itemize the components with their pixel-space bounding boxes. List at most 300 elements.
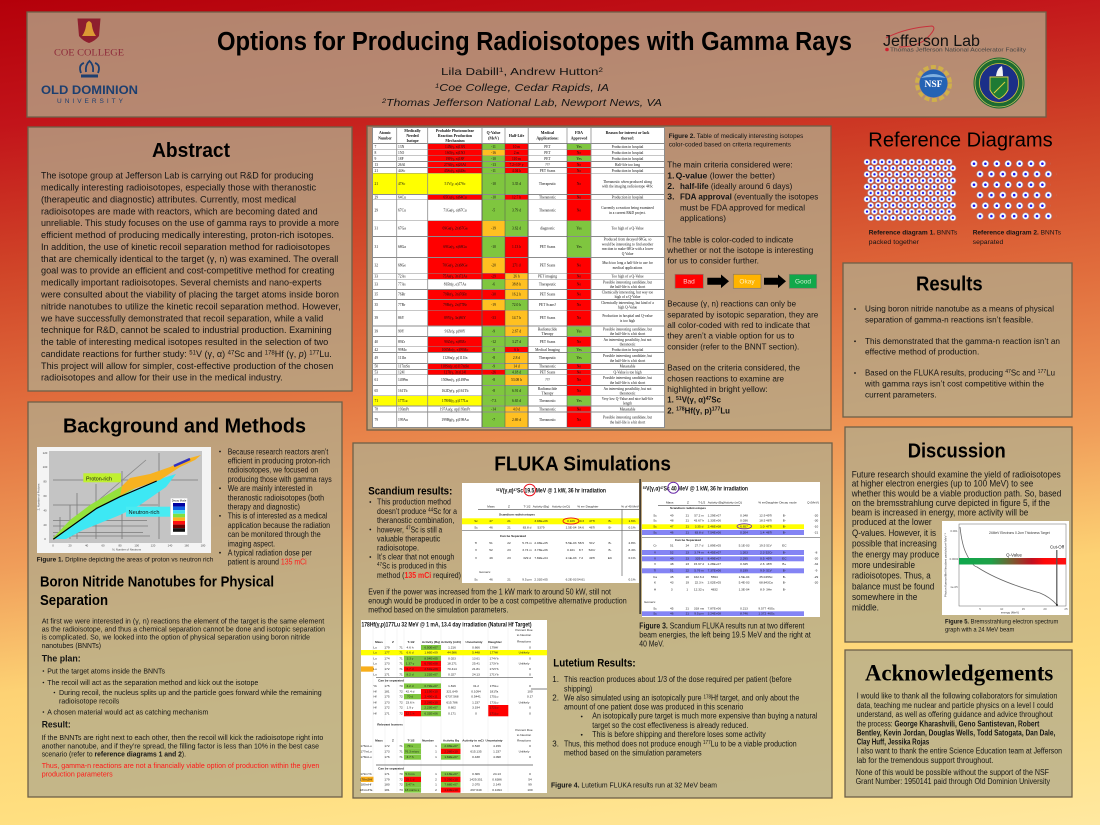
chart: bremsstrahlung spectrum: 20 (1043, 607, 1047, 611)
table: lutetium results: 0 (475, 712, 477, 716)
table: scandium at 19.5 MeV: Activity (Bq) (533, 504, 549, 508)
table: lutetium results: 0 (529, 646, 531, 650)
abstract text: medically interesting radioisotopes, especially those with theranostic (41, 183, 317, 193)
table: lutetium results: 172 (384, 706, 390, 710)
table: scandium at 19.5 MeV: 52 (489, 548, 493, 552)
table: medically interesting isotopes: No (577, 303, 581, 307)
table: medically interesting isotopes: 13 (374, 163, 378, 167)
table: scandium at 19.5 MeV: 2.31E+05 (534, 577, 548, 581)
table: scandium at 40 MeV: Mass (666, 500, 674, 504)
table: scandium at 40 MeV: 21 (686, 519, 689, 523)
lutetium results list: 3. (552, 739, 559, 748)
table: medically interesting isotopes: 2.69 d (512, 418, 521, 422)
abstract text: goal was to provide an efficient and cost-competitive method for creating (41, 266, 334, 276)
table: scandium at 40 MeV: 9.577 (758, 606, 766, 610)
result text (42, 733, 323, 759)
table: medically interesting isotopes: 50 (374, 365, 378, 369)
scandium bullets: Sc for a (433, 506, 457, 516)
table: medically interesting isotopes: Chemically interesting, but way too (602, 291, 653, 296)
table: medically interesting isotopes: 33 (374, 282, 378, 286)
abstract text: unreliable. This study focuses on the use of gamma rays to provide a more (41, 218, 339, 228)
table: lutetium results: 175Lu (490, 684, 499, 688)
table: scandium at 19.5 MeV: Sc (474, 577, 478, 581)
criteria list (667, 160, 818, 223)
lutetium results list: Thus, this method does not produce enough (564, 739, 721, 748)
table: medically interesting isotopes: FDA (575, 131, 583, 135)
table: lutetium results: 0.1094 (471, 690, 481, 694)
table: medically interesting isotopes: Medically (404, 129, 421, 133)
table: lutetium results: Lu (373, 667, 377, 671)
table: scandium at 40 MeV: 3.74 m (694, 550, 704, 554)
table: lutetium results: 1.37 y (406, 662, 415, 666)
table: medically interesting isotopes: Theranostic (539, 399, 556, 403)
divider between scandium tables (640, 479, 641, 614)
table: scandium at 19.5 MeV: B- (608, 548, 612, 552)
table: medically interesting isotopes: 21 (374, 169, 378, 173)
chart: bremsstrahlung spectrum: 15 (1022, 607, 1025, 611)
chart: dripline figure 1: 120 (43, 451, 48, 455)
table: scandium at 40 MeV: -21 (814, 530, 819, 534)
table: medically interesting isotopes: 27Al(γ, n)26Al (444, 163, 466, 168)
background bullets: therapy and diagnostic) (228, 502, 300, 512)
gamma-n explanation: all color-coded with red to indicate that (667, 320, 811, 330)
table: scandium at 19.5 MeV: 6.2E-03 (566, 577, 577, 581)
table: medically interesting isotopes: PET Scans (540, 169, 556, 173)
table: scandium at 40 MeV: 47Ti (766, 524, 772, 528)
lutetium results list: amount of one patient dose was produced in this scenario (564, 703, 744, 712)
table: scandium at 19.5 MeV: 21 (507, 526, 511, 530)
discussion text: at higher electron energies (up to 100 MeV) to see (852, 479, 1033, 489)
table: scandium at 40 MeV: 45 (670, 575, 674, 579)
table: lutetium results: Uncertainty (465, 640, 483, 644)
abstract text: that are chemically identical to the target (γ, n) was examined. The overall (41, 254, 338, 264)
table: lutetium results: 4.156 (493, 744, 501, 748)
table: medically interesting isotopes: An interesting possibility, but not (604, 338, 651, 343)
abstract text: Lu. (319, 349, 332, 359)
criteria list: Q-value (lower the better) (676, 170, 775, 180)
table: medically interesting isotopes: -6 (492, 282, 495, 286)
table: lutetium results: 0 (529, 712, 531, 716)
table: lutetium results: Activity (mCi) (441, 640, 461, 644)
table: lutetium results: 2 (435, 788, 437, 792)
table: medically interesting isotopes: in a current R&D project. (609, 211, 646, 215)
table: lutetium results: 1.237 (493, 749, 501, 753)
table: scandium at 19.5 MeV: V(γ,α) (500, 488, 513, 495)
table: medically interesting isotopes: Yes (576, 145, 582, 149)
results bullets (854, 304, 1060, 399)
table: scandium at 40 MeV: 49 (670, 513, 674, 517)
acknowledgements text: I also want to thank the entire Science Education team at Jefferson (857, 747, 1062, 756)
table: scandium at 40 MeV: Activity (Bq) (708, 500, 724, 504)
table: scandium at 40 MeV: 3He (766, 588, 772, 592)
table: lutetium results: Lu (373, 656, 377, 660)
table: lutetium results: 100 (527, 788, 533, 792)
table: lutetium results: 1 (435, 749, 437, 753)
table: medically interesting isotopes: Theranostic (539, 208, 556, 212)
background bullets: theranostic radioisotopes (both (228, 492, 324, 502)
table: lutetium results: 1 (435, 772, 437, 776)
boron intro text: At first we were interested in (γ, n) reactions the element of the target is the same element (42, 616, 325, 625)
logo: Old Dominion University: UNIVERSITY (57, 98, 124, 105)
table: scandium at 40 MeV: 4832 (711, 588, 718, 592)
discussion text: radioisotopes. Thus, a (852, 571, 931, 581)
table: lutetium results: 2.61E+09 (424, 667, 438, 671)
table: medically interesting isotopes: 8 (374, 151, 376, 155)
table: medically interesting isotopes: 38.8 h (512, 282, 521, 286)
table: scandium at 19.5 MeV: 0.101 (567, 548, 575, 552)
table: medically interesting isotopes: Number (378, 136, 392, 140)
caption: reference diagram 1 (869, 230, 958, 246)
table: scandium at 40 MeV: 52Cr (766, 550, 772, 554)
table: lutetium results: 6.72E+07 (424, 684, 438, 688)
table: scandium at 40 MeV: 49 (670, 557, 674, 561)
table: medically interesting isotopes: No (577, 378, 581, 382)
the plan bullets: The recoil will act as the separation method and kick out the isotope (47, 678, 258, 687)
table: medically interesting isotopes: -20 (491, 264, 496, 268)
table: medically interesting isotopes: -7 (492, 418, 495, 422)
table: lutetium results: Activity Bq (443, 739, 459, 743)
table: medically interesting isotopes: Q Value (622, 252, 634, 256)
table: medically interesting isotopes: the half-life is a bit short (610, 420, 645, 424)
acknowledgements text (856, 692, 1062, 786)
figure 2 caption (669, 133, 804, 149)
result text: scenario (refer to reference diagrams 1 and 2). (42, 750, 186, 759)
figure 1 caption: Figure 1. Dripline depicting the areas of proton vs neutron rich (37, 557, 214, 564)
table: lutetium results: to Neutron (517, 733, 531, 737)
table: lutetium results: to Neutron (517, 633, 531, 637)
table: medically interesting isotopes: the half-life is a bit short (610, 359, 645, 363)
table: medically interesting isotopes: Mechanism (445, 139, 465, 143)
logo: NSF: NSF (925, 80, 943, 90)
table: medically interesting isotopes: Production in hospital (612, 157, 643, 161)
result heading: Result: (42, 720, 71, 730)
table: scandium at 19.5 MeV: 5.5E-03 (566, 541, 577, 545)
table: scandium at 40 MeV: Ca (653, 575, 657, 579)
table: medically interesting isotopes: Yes (576, 348, 582, 352)
table: lutetium results: 173 (384, 662, 390, 666)
table: medically interesting isotopes: 35 (374, 303, 378, 307)
table: lutetium results: 171Yb (490, 672, 499, 676)
table: medically interesting isotopes: 29 (374, 196, 378, 200)
table: scandium at 19.5 MeV: V (475, 548, 478, 552)
table: scandium at 40 MeV: 1.89E+05 (708, 544, 721, 548)
table: scandium at 40 MeV: V(γ,α) (646, 486, 660, 493)
label: neutron-rich (126, 507, 170, 517)
table: scandium at 40 MeV: 45 (670, 606, 674, 610)
table: scandium at 19.5 MeV: 52Cr (589, 548, 595, 552)
table: scandium at 40 MeV: V (654, 557, 657, 561)
table: medically interesting isotopes: 127I(γ, 3n)124I (444, 370, 467, 376)
result text: another nanotube, and if they’re spread, the filling factor is less than 10% in the best case (42, 741, 319, 750)
table: scandium at 40 MeV: 3.24E+08 (708, 612, 721, 616)
table: medically interesting isotopes: Q-Value (487, 131, 501, 135)
table: scandium at 40 MeV: Sc (653, 519, 657, 523)
chosen reactions: chosen reactions to examine are (667, 373, 784, 383)
chart: bremsstrahlung spectrum: 25 (1064, 607, 1068, 611)
table: medically interesting isotopes: Theranostic (539, 418, 556, 422)
abstract text: 177 (309, 350, 320, 356)
background bullets: application because the radiation (228, 520, 330, 530)
the plan bullets: During recoil, the nucleus splits up and the particle goes forward while the remaining (59, 688, 322, 697)
figure 2 caption: color-coded based on criteria requirements (669, 142, 792, 149)
abstract text: the table of interesting medical isotopes resulted in the selection of two (41, 337, 328, 347)
table: lutetium results: 70 d (407, 695, 413, 699)
chosen reactions: 2. (667, 405, 674, 415)
table: lutetium results: 175Lu (490, 695, 499, 699)
table: medically interesting isotopes: Reason for interest or lack (606, 131, 650, 135)
abstract text: we have successfully demonstrated that recoil separation, while a valid (40, 313, 323, 323)
table: medically interesting isotopes: 65 (374, 389, 378, 393)
table: scandium at 19.5 MeV: 54.6 (578, 526, 584, 530)
table: lutetium results: T-1/2 (407, 640, 415, 644)
criteria list: The main criteria considered were: (667, 160, 793, 170)
table: lutetium results: 0.023 (448, 656, 456, 660)
table: scandium at 40 MeV: 83.8 d (695, 530, 704, 534)
table: medically interesting isotopes: Therapeutic (539, 182, 556, 186)
table: medically interesting isotopes: No (577, 208, 581, 212)
chart: dripline figure 1: 60 (43, 494, 47, 498)
table: medically interesting isotopes: 6.91 d (512, 389, 521, 393)
heading: discussion: Discussion (908, 440, 1006, 462)
table: scandium at 19.5 MeV: 3.74 m (522, 548, 532, 552)
caption: reference diagram 2: separated (973, 239, 1004, 246)
table: medically interesting isotopes: -9 (492, 329, 495, 333)
table: lutetium results: 1 (435, 755, 437, 759)
table: medically interesting isotopes: Isotope (406, 139, 419, 143)
chart: bremsstrahlung spectrum: 10 (1000, 607, 1004, 611)
chart: dripline figure 1: 40 (43, 508, 47, 512)
acknowledgements text: data, teaching me nuclear and particle physics on a level I could (857, 701, 1053, 710)
table: medically interesting isotopes: PET Scans (540, 316, 556, 320)
table: lutetium results: 1.62E+07 (444, 755, 458, 759)
chosen reactions: Lu (720, 405, 730, 415)
table: medically interesting isotopes: theranostic (620, 392, 636, 396)
chart: dripline figure 1 (36, 447, 211, 553)
table: medically interesting isotopes: 197Au(γ, αp)193mPt (440, 407, 470, 412)
gamma-n explanation: consider (refer to the BNNT section). (667, 341, 799, 351)
table: scandium at 40 MeV: 4.45E+07 (708, 550, 721, 554)
lutetium results list: This is before shipping and therefore loses some activity (592, 730, 766, 739)
authors: 1 (499, 67, 504, 74)
table: scandium at 19.5 MeV: 21 (507, 577, 511, 581)
table: scandium at 40 MeV: Q (MeV) (807, 500, 819, 504)
table: medically interesting isotopes: 7.2×10⁵ y (509, 163, 524, 167)
table: medically interesting isotopes: No (577, 264, 581, 268)
table: lutetium results: 1.9 y (407, 706, 414, 710)
table: lutetium results: 3.7 h (407, 755, 414, 759)
background bullets: imaging aspect. (228, 538, 275, 548)
table: medically interesting isotopes: 7 (374, 145, 376, 149)
table: scandium at 40 MeV: 47 (660, 485, 664, 490)
lutetium results list: This reaction produces about 1/3 of the dose required per patient (before (564, 675, 792, 684)
table: medically interesting isotopes: Production in hospital (612, 348, 643, 352)
table: scandium at 19.5 MeV: 2.1E-03 (566, 556, 577, 560)
table: medically interesting isotopes: -19 (491, 303, 496, 307)
figure 4 caption: Figure 4. Lutetium FLUKA results run at 32 MeV beam (551, 781, 717, 790)
background bullets: can be monitored through the (228, 529, 321, 539)
table: scandium at 19.5 MeV: 9.5 μm (522, 577, 532, 581)
table: lutetium results: 6.76E+08 (424, 662, 438, 666)
table: medically interesting isotopes: Production in hospital (612, 169, 643, 173)
chosen reactions: 47 (706, 396, 711, 402)
table: medically interesting isotopes: 100Mo(γ, n)99Mo (442, 348, 468, 353)
table: lutetium results: 13.61 (472, 656, 480, 660)
table: lutetium results: 5.29E+10 (444, 777, 458, 781)
table: lutetium results: 72 (399, 712, 403, 716)
table: scandium at 40 MeV: 2.46E+08 (708, 524, 721, 528)
table: scandium at 19.5 MeV: 2.03E+05 (534, 541, 548, 545)
table: medically interesting isotopes: Possible interesting candidate, but (603, 328, 652, 332)
table: medically interesting isotopes: 39 (374, 329, 378, 333)
acknowledgements text: Grant Number: 1950141 paid through Old Dominion University (856, 777, 1050, 786)
table: scandium at 40 MeV: 1.4 (760, 530, 765, 534)
table: scandium at 40 MeV: 51V (766, 544, 773, 548)
table: medically interesting isotopes: Yes (576, 356, 582, 360)
table: lutetium results: 172Lu (490, 706, 499, 710)
table: lutetium results: 174 (384, 656, 390, 660)
table: scandium at 40 MeV: 46 (670, 530, 674, 534)
table: scandium at 19.5 MeV: 8.7 (579, 548, 583, 552)
label: neutron-rich: Neutron-rich (128, 510, 160, 516)
discussion text (851, 469, 1061, 613)
table: lutetium results: T-1/2 (407, 739, 415, 743)
scandium bullets: however, (377, 524, 411, 534)
table: lutetium results: 0.306 (472, 772, 480, 776)
table: scandium at 19.5 MeV: 46Ti (589, 526, 595, 530)
table: medically interesting isotopes: No (577, 316, 581, 320)
table: lutetium results: 7.68E+07 (444, 783, 458, 787)
table: medically interesting isotopes: length (623, 402, 632, 406)
table: medically interesting isotopes: 71Ga(γ, α)67Cu (443, 208, 467, 214)
chart: bremsstrahlung spectrum: 5 (979, 607, 981, 611)
table: scandium at 40 MeV: 9.9 (760, 569, 765, 573)
section: reference diagrams (864, 130, 1062, 246)
table: scandium at 19.5 MeV: Sc 19.5 MeV @ 1 kW, 36 hr irradiation (517, 488, 606, 495)
table: medically interesting isotopes: 33 (374, 274, 378, 278)
table: medically interesting isotopes: Radionuclide (538, 387, 557, 391)
table: scandium at 40 MeV (642, 482, 820, 617)
table: scandium at 40 MeV: 19.5 (759, 544, 766, 548)
table: scandium at 40 MeV: 48Ti (766, 562, 772, 566)
authors: 2 (598, 67, 603, 74)
logo: Old Dominion University: OLD DOMINION (41, 85, 138, 97)
table: lutetium results: 0.666 (472, 646, 480, 650)
table: scandium at 40 MeV: EC (782, 544, 787, 548)
table: lutetium results: 0 (529, 744, 531, 748)
table: medically interesting isotopes: No (577, 169, 581, 173)
table: lutetium results: 71 (399, 667, 403, 671)
table: lutetium results: Hf (373, 690, 377, 694)
table: scandium at 40 MeV: Isomers: (644, 600, 656, 604)
table: scandium at 19.5 MeV: Sc (474, 526, 478, 530)
table: scandium at 40 MeV: 0.213 (740, 606, 748, 610)
table: medically interesting isotopes: Currently a reaction being examined (601, 206, 654, 210)
table: medically interesting isotopes: -14 (491, 407, 496, 411)
table: medically interesting isotopes: No (577, 151, 581, 155)
table: scandium at 40 MeV: 5.4E-03 (739, 581, 750, 585)
table: scandium at 19.5 MeV: 8.4% (628, 548, 636, 552)
table: lutetium results: 176mLu (360, 744, 372, 748)
table: scandium at 19.5 MeV: Z (508, 504, 510, 508)
table: medically interesting isotopes: 2 m (514, 151, 519, 155)
table: scandium at 19.5 MeV: V (475, 556, 478, 560)
table: lutetium results: 177mLu (360, 749, 372, 753)
table: lutetium results: 4.6 h (407, 646, 414, 650)
table: medically interesting isotopes: Much too long a half-life to use for (602, 261, 654, 265)
table: medically interesting isotopes: 9 (374, 157, 376, 161)
color scale: bad (675, 274, 703, 288)
table: lutetium results: 5.448 (472, 651, 480, 655)
criteria list: 2. (667, 181, 674, 191)
discussion text: more undesirable (852, 560, 915, 570)
table: lutetium results: 615.786 (446, 700, 458, 704)
table: medically interesting isotopes: No (577, 418, 581, 422)
scandium bullets: Sc is still a (411, 524, 442, 534)
table: medically interesting isotopes: 162Dy(γ, p)161Tb (442, 389, 469, 394)
table: scandium at 40 MeV: 7.37E+06 (708, 569, 721, 573)
heading: abstract: Abstract (152, 140, 230, 162)
table: scandium at 40 MeV: Sc (653, 513, 657, 517)
table: lutetium results: 1.19E+10 (424, 690, 438, 694)
table: scandium at 40 MeV: Decay mode (779, 500, 797, 504)
table: scandium at 40 MeV: Sc (653, 530, 657, 534)
table: medically interesting isotopes: Therapy (542, 392, 554, 396)
table: scandium at 40 MeV: 0.199 (740, 569, 748, 573)
chart: dripline figure 1: 100 (43, 465, 48, 469)
table: lutetium results: 72 (399, 706, 403, 710)
table: scandium at 19.5 MeV: 21 (507, 519, 511, 523)
table: scandium at 19.5 MeV: 0.1% (628, 556, 636, 560)
table: scandium at 40 MeV: -20 (814, 581, 819, 585)
table: medically interesting isotopes: Yes (576, 227, 582, 231)
table: scandium at 40 MeV: 5.76 m (694, 569, 704, 573)
table: medically interesting isotopes: 19F(γ, n)18F (446, 157, 464, 162)
table: lutetium results: 181 (384, 788, 390, 792)
chart: dripline figure 1: 20 (43, 523, 47, 527)
table: medically interesting isotopes: 72.0 h (512, 303, 521, 307)
scandium bullets: 47 (377, 562, 382, 568)
background bullets: producing those with gamma rays (228, 474, 332, 484)
chart: bremsstrahlung spectrum: Q-Value (1006, 552, 1022, 557)
table: medically interesting isotopes: No (577, 293, 581, 297)
table: medically interesting isotopes: 2.8 d (513, 356, 520, 360)
table: scandium at 40 MeV: -8 (815, 550, 818, 554)
table: scandium at 40 MeV: 3.35 d (695, 524, 704, 528)
table: medically interesting isotopes: No (577, 365, 581, 369)
table: medically interesting isotopes: 61 (374, 378, 378, 382)
table: medically interesting isotopes: Produced from decayed 68Ge, so (604, 238, 652, 242)
table: medically interesting isotopes: Yes (576, 245, 582, 249)
table: medically interesting isotopes: 86Y (398, 316, 405, 320)
heading: reference diagrams: Reference Diagrams (868, 130, 1053, 152)
table: medically interesting isotopes: No (577, 163, 581, 167)
table: lutetium results: 1.816 (448, 684, 456, 688)
table: lutetium results: Mass (375, 640, 383, 644)
results bullets: current parameters. (865, 389, 937, 399)
chosen reactions: Sc (711, 395, 721, 405)
table: medically interesting isotopes: -8 (492, 378, 495, 382)
acknowledgements text: I would like to thank all the following collaborators for simulation (857, 692, 1057, 701)
table: scandium at 19.5 MeV: 0.1% (628, 526, 636, 530)
table: scandium at 19.5 MeV: B- (608, 519, 612, 523)
acknowledgements text: lab for the tremendous support throughout. (857, 756, 993, 765)
table: scandium at 19.5 MeV: 46 (489, 577, 493, 581)
chosen reactions: V(γ, α) (682, 395, 706, 405)
table: lutetium results: 0.1094 (492, 788, 502, 792)
heading: boron nitride nanotubes (40, 574, 274, 609)
criteria list: applications) (680, 213, 726, 223)
table: medically interesting isotopes: Half-Life (509, 134, 524, 138)
